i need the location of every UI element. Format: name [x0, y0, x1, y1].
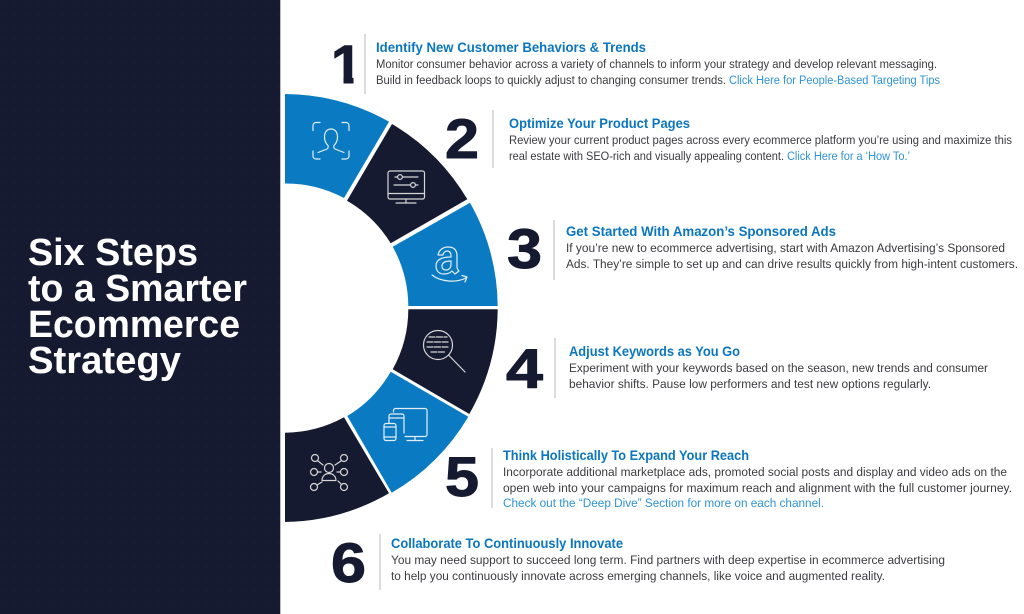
- step 5 body: Incorporate additional marketplace ads, promoted social posts and display and video ads on the: [503, 465, 1007, 479]
- segment 2: navy with monitor sliders icon: [347, 124, 467, 243]
- step 3 heading: Get Started With Amazon’s Sponsored Ads: [566, 224, 836, 239]
- step 3 body: [566, 241, 1018, 271]
- step 1: [331, 33, 940, 96]
- step 1 heading: Identify New Customer Behaviors & Trends: [376, 40, 646, 55]
- semicircle segmented wheel: [285, 94, 498, 522]
- step 1 body: [376, 57, 940, 87]
- step 2 body: [509, 133, 1012, 163]
- number 2: 2: [445, 107, 479, 170]
- step 4 body: [569, 361, 988, 391]
- number 3: 3: [507, 217, 542, 280]
- step 5 heading: Think Holistically To Expand Your Reach: [503, 448, 749, 463]
- step 1 body: Build in feedback loops to quickly adjust to changing consumer trends.: [376, 73, 726, 87]
- number 4: 4: [506, 337, 543, 400]
- step 2: [445, 107, 1012, 170]
- step 5 body: open web into your campaigns for maximum reach and alignment with the full customer journey.: [503, 481, 1012, 495]
- segment 5: blue with devices icon: [347, 372, 468, 493]
- panel: dark title sidebar: [0, 0, 281, 614]
- title: Ecommerce: [28, 304, 240, 346]
- step 6 body: [391, 553, 945, 583]
- step 4: [506, 337, 988, 400]
- icon: phone, tablet and desktop: [384, 408, 427, 440]
- icon: Amazon logo: [432, 247, 467, 282]
- step 6 heading: Collaborate To Continuously Innovate: [391, 536, 623, 551]
- segment 4: navy with magnifier icon: [393, 309, 498, 414]
- step 4 body: Experiment with your keywords based on the season, new trends and consumer: [569, 361, 988, 375]
- title: Six Steps: [28, 232, 198, 274]
- step 4 body: behavior shifts. Pause low performers and test new options regularly.: [569, 377, 931, 391]
- step 6 body: You may need support to succeed long term. Find partners with deep expertise in ecommerce advertising: [391, 553, 945, 567]
- segment 6: navy with network icon: [285, 417, 389, 522]
- icon: face scan: [313, 122, 349, 159]
- step 6: [331, 531, 945, 594]
- title: to a Smarter: [28, 268, 247, 310]
- segment 1: blue with face-scan icon: [285, 94, 389, 198]
- step 5 body: [503, 465, 1012, 510]
- step 4 heading: Adjust Keywords as You Go: [569, 344, 740, 359]
- number 6: 6: [331, 531, 366, 594]
- step 2 heading: Optimize Your Product Pages: [509, 116, 690, 131]
- step 5 body: Check out the “Deep Dive” Section for more on each channel.: [503, 496, 824, 510]
- icon: person network: [310, 454, 348, 490]
- step 1 body: Click Here for People-Based Targeting Tips: [729, 73, 940, 87]
- number 5: 5: [445, 445, 479, 508]
- step 2 body: Click Here for a ‘How To.’: [787, 149, 910, 163]
- step 1 body: Monitor consumer behavior across a variety of channels to inform your strategy and develop relevant messaging.: [376, 57, 937, 71]
- step 5: [445, 445, 1012, 510]
- icon: magnifier over text: [424, 330, 465, 372]
- segment 3: blue with Amazon icon: [393, 203, 498, 306]
- step 3 body: If you’re new to ecommerce advertising, start with Amazon Advertising’s Sponsored: [566, 241, 1005, 255]
- title: Strategy: [28, 340, 181, 382]
- icon: monitor with sliders: [388, 171, 424, 203]
- step 3: [507, 217, 1018, 280]
- step 6 body: to help you continuously innovate across emerging channels, like voice and augmented reality.: [391, 569, 885, 583]
- title: [28, 232, 247, 382]
- number 1: 1: [331, 33, 362, 96]
- step 2 body: real estate with SEO-rich and visually appealing content.: [509, 149, 784, 163]
